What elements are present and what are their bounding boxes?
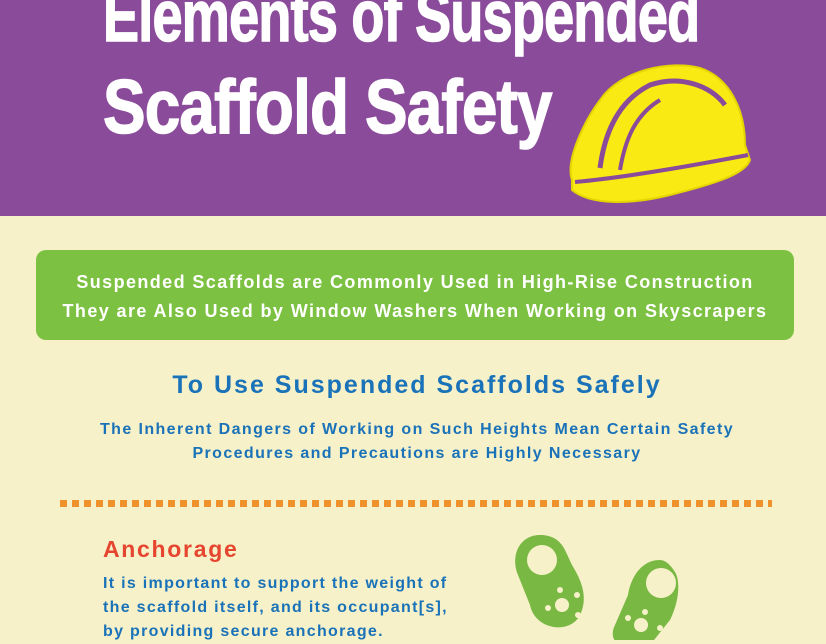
anchorage text: It is important to support the weight of <box>103 575 447 592</box>
green banner: Suspended Scaffolds are Commonly Used in High-Rise Construction <box>76 272 754 292</box>
header band <box>0 0 826 216</box>
subheading text <box>100 421 734 462</box>
section heading: anchorage: Anchorage <box>103 536 238 562</box>
anchorage text: the scaffold itself, and its occupant[s], <box>103 599 448 616</box>
anchorage text: by providing secure anchorage. <box>103 623 384 640</box>
green banner: They are Also Used by Window Washers When Working on Skyscrapers <box>63 301 767 321</box>
subheading text: The Inherent Dangers of Working on Such Heights Mean Certain Safety <box>100 421 734 438</box>
green banner <box>36 250 794 340</box>
title line 2: Scaffold Safety <box>103 65 552 150</box>
icon: hard hat <box>570 64 751 203</box>
anchorage text <box>103 575 448 640</box>
icon: pulleys <box>515 535 678 640</box>
heading: To Use Suspended Scaffolds Safely <box>172 371 662 399</box>
subheading text: Procedures and Precautions are Highly Necessary <box>192 445 642 462</box>
